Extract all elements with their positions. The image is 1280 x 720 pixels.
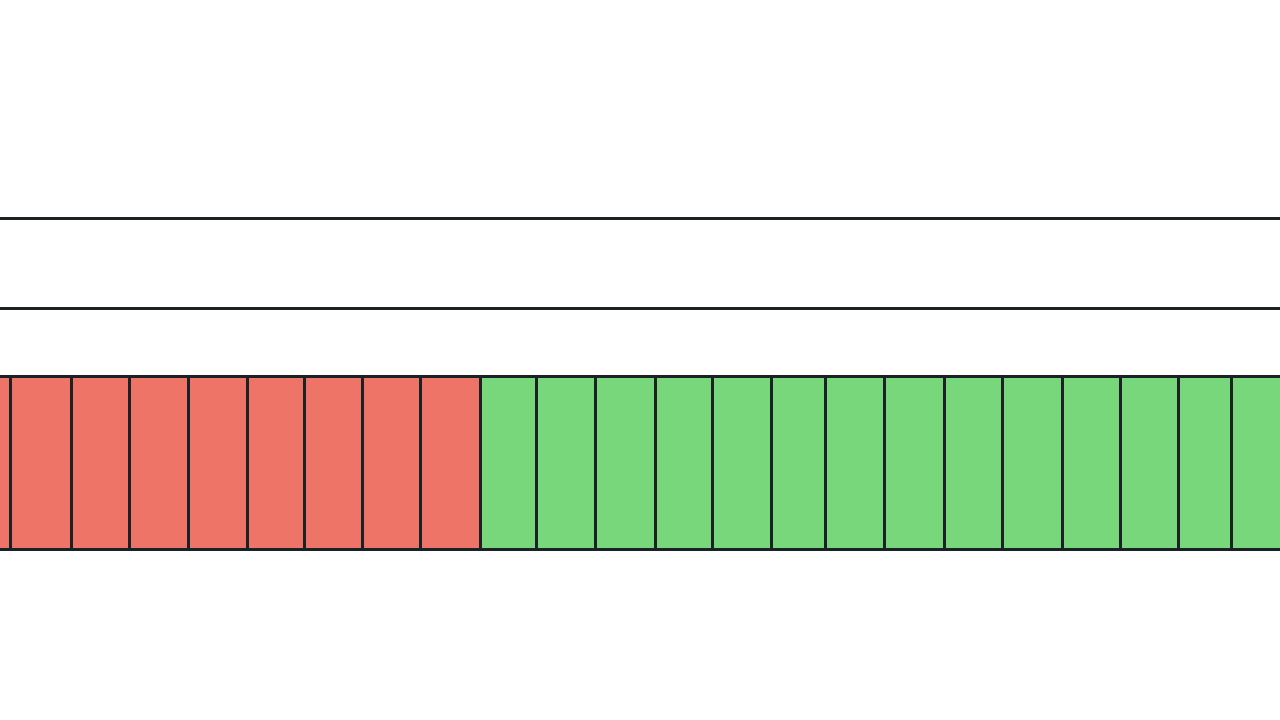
- red segments: [0, 377, 480, 549]
- second horizontal rule: [0, 307, 1280, 310]
- green segments: [480, 377, 1280, 549]
- top horizontal rule: [0, 217, 1280, 220]
- segmented bar: [0, 375, 1280, 551]
